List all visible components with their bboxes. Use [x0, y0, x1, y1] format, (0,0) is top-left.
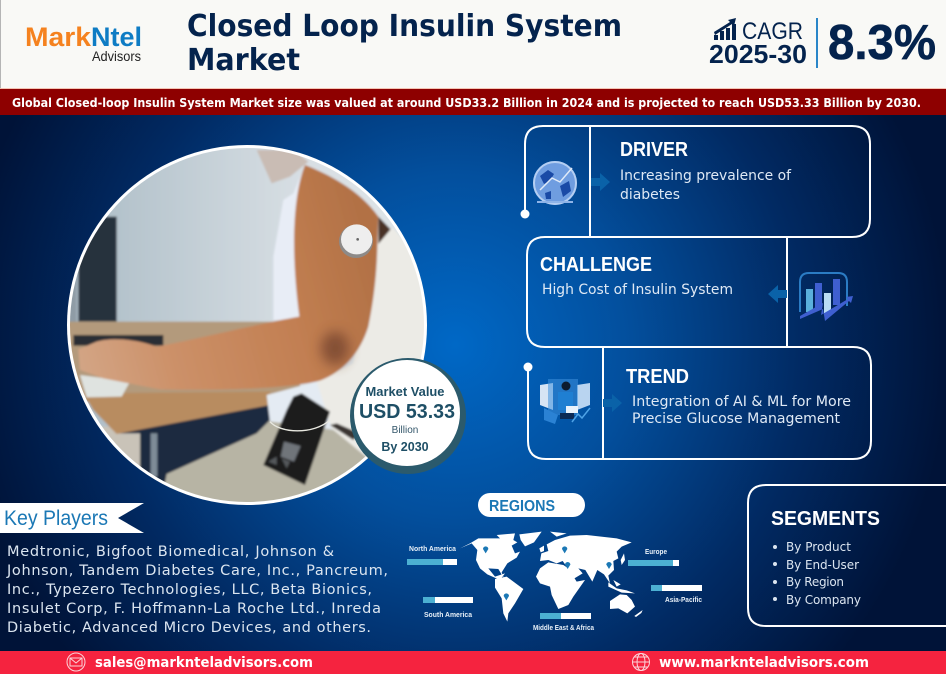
- title: Closed Loop Insulin System: [187, 9, 622, 44]
- heading: TREND: [626, 366, 689, 388]
- footer bar: [0, 651, 946, 674]
- icon: person with dashboards: [540, 379, 590, 424]
- europe: [628, 549, 679, 566]
- panel: regions: [407, 493, 702, 632]
- regions heading: REGIONS: [489, 498, 555, 515]
- key players list: Johnson, Tandem Diabetes Care, Inc., Pancreum,: [6, 563, 388, 579]
- europe: Europe: [645, 549, 667, 556]
- title: [187, 9, 622, 78]
- panel: driver: [520, 126, 870, 237]
- CAGR value: 8.3%: [828, 16, 936, 70]
- text: High Cost of Insulin System: [542, 282, 733, 298]
- north america: [407, 546, 457, 565]
- header band: [0, 0, 946, 89]
- text: Precise Glucose Management: [632, 411, 840, 427]
- segments list: By End-User: [786, 558, 859, 572]
- CAGR period: 2025-30: [709, 39, 807, 69]
- logo: MarkNtel Advisors: Advisors: [92, 48, 141, 64]
- key players list: Diabetic, Advanced Micro Devices, and others.: [7, 620, 371, 636]
- key players list: Insulet Corp, F. Hoffmann-La Roche Ltd., Inreda: [7, 601, 381, 617]
- market value badge: USD 53.33: [359, 401, 455, 423]
- logo: MarkNtel Advisors: Ntel: [91, 22, 142, 52]
- middle east and africa: [533, 613, 594, 632]
- panel: segments: [748, 485, 946, 626]
- heading: CHALLENGE: [540, 254, 652, 276]
- south america: [423, 597, 473, 619]
- heading: DRIVER: [620, 139, 688, 161]
- segments list: [773, 540, 861, 607]
- text: Increasing prevalence of: [620, 168, 792, 184]
- segments heading: SEGMENTS: [771, 508, 880, 530]
- key players list: Inc., Typezero Technologies, LLC, Beta Bionics,: [7, 582, 372, 598]
- north america: North America: [409, 546, 456, 553]
- asia-pacific: [651, 585, 702, 604]
- logo: MarkNtel Advisors: [25, 22, 142, 64]
- arrow: [768, 285, 787, 303]
- market value badge: Market Value: [366, 384, 444, 399]
- icon: globe: [533, 161, 577, 205]
- key players list: [6, 544, 388, 636]
- asia-pacific: Asia-Pacific: [665, 597, 702, 604]
- key players ribbon: Key Players: [4, 507, 108, 530]
- market value badge: [350, 358, 466, 474]
- segments list: By Region: [786, 575, 844, 589]
- segments list: By Product: [786, 540, 851, 554]
- text: [620, 168, 792, 203]
- south america: South America: [424, 612, 472, 619]
- CAGR block: [709, 16, 936, 70]
- text: diabetes: [620, 187, 680, 203]
- world map: [460, 532, 643, 622]
- arrow: [591, 173, 610, 191]
- CAGR label: CAGR: [742, 18, 803, 45]
- panel: trend: [524, 347, 871, 459]
- text: Integration of AI & ML for More: [632, 394, 851, 410]
- regions heading: [478, 493, 585, 517]
- icon: growth bars: [714, 18, 736, 40]
- panel: challenge: [527, 237, 853, 347]
- arrow: [603, 394, 622, 412]
- map pins: [483, 546, 612, 600]
- logo: MarkNtel Advisors: Mark: [25, 22, 92, 52]
- market value badge: By 2030: [381, 440, 429, 454]
- icon: globe: [632, 654, 650, 670]
- photo: arm with glucose sensor and insulin pump: [60, 140, 437, 510]
- icon: rising bar chart: [800, 273, 853, 321]
- segments list: By Company: [786, 593, 861, 607]
- text: [632, 394, 851, 427]
- email: sales@marknteladvisors.com: [95, 655, 313, 671]
- key players ribbon: [0, 503, 144, 533]
- icon: mail: [67, 653, 85, 671]
- title: Market: [187, 43, 300, 78]
- summary banner: [0, 89, 946, 115]
- key players list: Medtronic, Bigfoot Biomedical, Johnson &: [7, 544, 334, 560]
- middle east and africa: Middle East & Africa: [533, 625, 594, 632]
- website: www.marknteladvisors.com: [659, 655, 869, 671]
- market value badge: Billion: [392, 425, 418, 436]
